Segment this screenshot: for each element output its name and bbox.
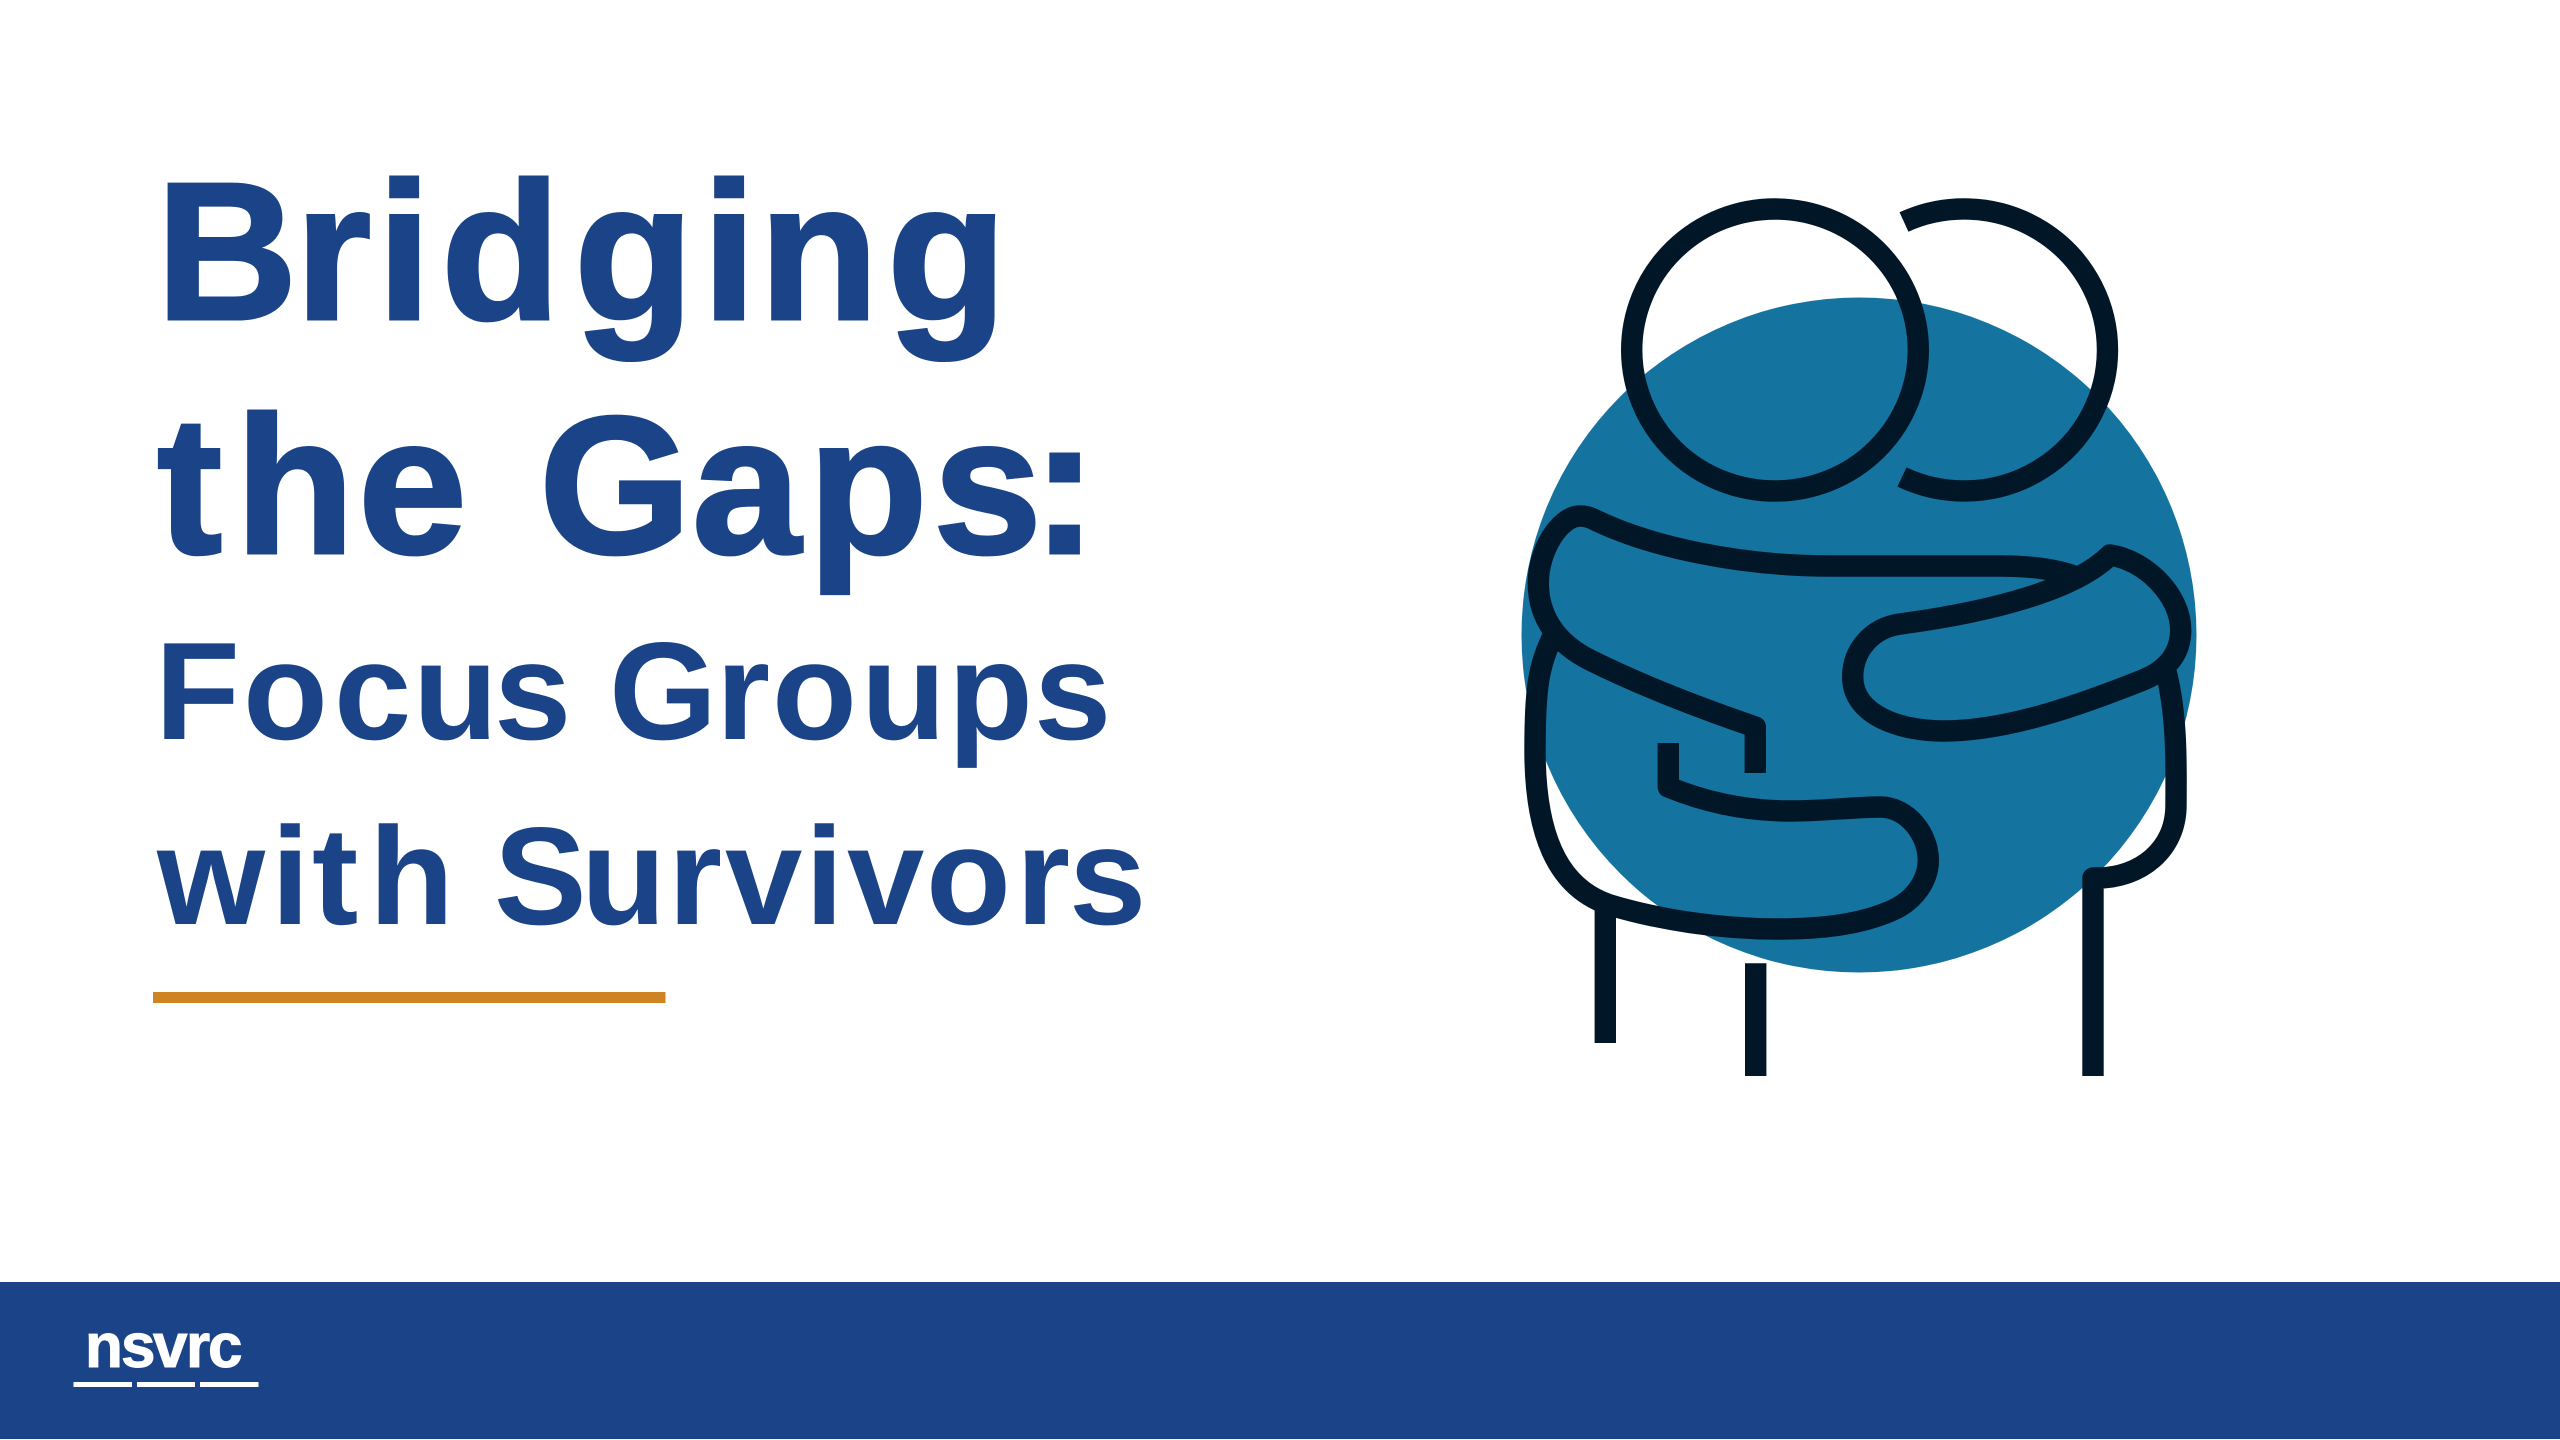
- title line 2: the Gaps:: [157, 376, 1097, 595]
- middle leg: [1745, 963, 1766, 1076]
- left leg: [1595, 900, 1616, 1043]
- title: Bridging the Gaps: [156, 142, 1097, 595]
- logo dashes: [74, 1382, 258, 1387]
- blue background circle: [1522, 298, 2196, 972]
- accent underline: [153, 992, 666, 1003]
- right body and leg: [2093, 668, 2176, 1076]
- logo: nsvrc: [74, 1312, 258, 1387]
- subtitle line 1: Focus Groups: [155, 614, 1111, 769]
- illustration: two people hugging over a blue circle: [1522, 209, 2196, 1076]
- subtitle line 2: with Survivors: [156, 799, 1146, 954]
- right head: [1902, 209, 2107, 491]
- logo wordmark: nsvrc: [85, 1312, 242, 1381]
- lower arm and left body: [1535, 634, 1928, 929]
- left head: [1632, 209, 1918, 491]
- arm of right figure: [1853, 555, 2181, 731]
- footer band: [0, 1282, 2560, 1439]
- upper arm of left figure: [1538, 516, 2079, 773]
- subtitle: Focus Groups with Survivors: [155, 614, 1146, 954]
- title line 1: Bridging: [156, 142, 1007, 361]
